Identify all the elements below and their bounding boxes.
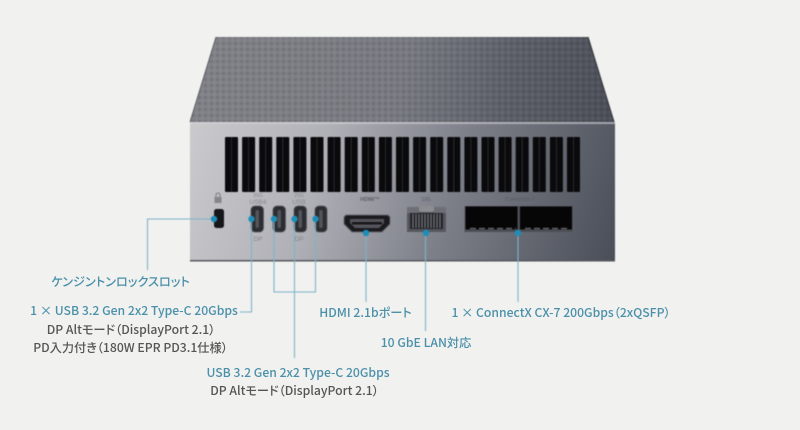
ports: USB Type-C row xyxy=(251,206,327,232)
port labels: USB-C markings: 20G xyxy=(253,193,263,199)
leader: USB-C left xyxy=(240,219,252,312)
top face xyxy=(190,37,614,122)
port labels: USB-C markings: DP xyxy=(294,236,304,243)
label: ConnectX: 1 × ConnectX CX-7 200Gbps（2xQSFP） xyxy=(451,303,671,321)
leader: LAN xyxy=(424,233,426,331)
port labels: USB-C markings: USB xyxy=(292,199,306,206)
port: HDMI xyxy=(344,215,390,232)
label: LAN: 10 GbE LAN対応 xyxy=(381,333,471,351)
label: USB 3.2 single port: 1 × USB 3.2 Gen 2x2 Type-C 20Gbps xyxy=(30,301,238,319)
port labels: USB-C markings: 20G xyxy=(294,193,304,199)
ventilation slots xyxy=(225,137,580,192)
callout dots xyxy=(211,216,521,236)
leader: QSFP xyxy=(517,233,519,302)
text: DP Alt mode note 2: DP Altモード（DisplayPort 2.1） xyxy=(210,381,379,399)
device: mini PC enclosure xyxy=(190,37,615,262)
leader: HDMI xyxy=(365,233,367,302)
label: Kensington lock slot: ケンジントンロックスロット xyxy=(51,272,190,290)
port labels: USB-C markings xyxy=(250,193,535,243)
label: HDMI: HDMI 2.1bポート xyxy=(319,303,412,321)
port: Kensington lock xyxy=(214,209,224,228)
callout lines xyxy=(148,219,518,358)
port: RJ45 LAN xyxy=(407,206,446,232)
front face xyxy=(190,122,615,261)
text: PD input note: PD入力付き（180W EPR PD3.1仕様） xyxy=(33,338,228,356)
port labels: USB-C markings: 10G xyxy=(421,197,431,203)
port labels: USB-C markings: HDMI™ xyxy=(360,197,380,203)
text: DP Alt mode note: DP Altモード（DisplayPort 2.1） xyxy=(47,320,215,338)
leader: USB-C pair bracket xyxy=(274,219,316,292)
port labels: USB-C markings: ConnectX-7 xyxy=(505,197,535,203)
icon: lock xyxy=(214,193,222,203)
port: dual QSFP xyxy=(464,206,572,232)
port labels: USB-C markings: USB4 xyxy=(250,199,267,206)
leader: USB-C third port xyxy=(294,219,296,358)
port labels: USB-C markings: DP xyxy=(253,236,263,243)
label: USB 3.2 ports: USB 3.2 Gen 2x2 Type-C 20Gbps xyxy=(206,363,390,381)
leader: Kensington xyxy=(148,219,214,270)
